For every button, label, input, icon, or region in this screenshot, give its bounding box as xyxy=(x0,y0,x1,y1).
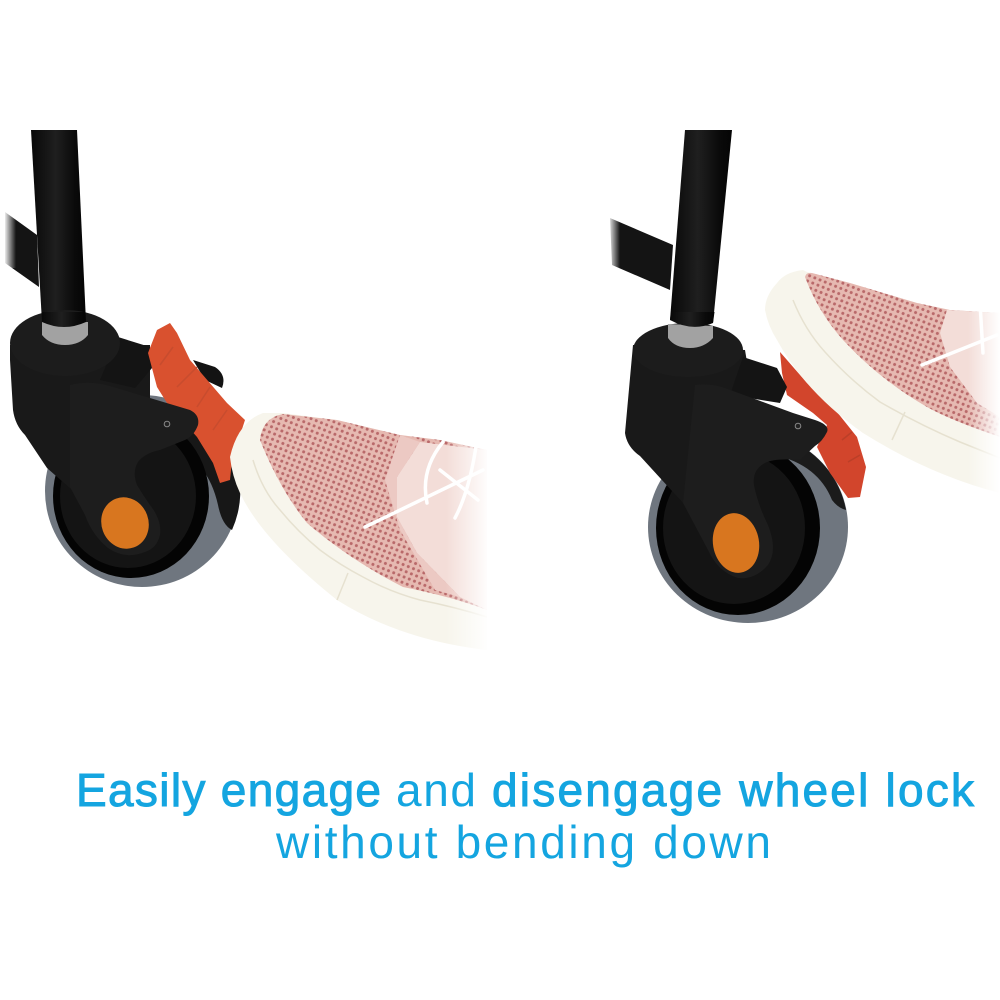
right swivel cap xyxy=(633,323,743,377)
left brake pedal xyxy=(148,323,245,483)
right sole detail xyxy=(793,300,1000,458)
caption line 1: disengage wheel lock xyxy=(492,764,975,816)
right fork plate xyxy=(683,384,828,578)
left cross tube xyxy=(5,212,39,287)
right nut xyxy=(668,324,713,348)
left laces xyxy=(365,440,483,527)
right wheel assembly xyxy=(608,130,866,623)
left reflector xyxy=(94,491,156,555)
left lever back xyxy=(193,360,223,388)
left shoe xyxy=(230,413,490,657)
right pole xyxy=(670,130,732,323)
left pole xyxy=(31,130,86,322)
left pole lower xyxy=(42,312,86,327)
left housing xyxy=(10,345,150,490)
right pin xyxy=(795,423,801,429)
right mesh upper xyxy=(805,273,1000,437)
left fork plate xyxy=(70,383,198,555)
right cross tube xyxy=(610,218,673,290)
left pin xyxy=(164,421,170,427)
left swivel cap xyxy=(10,310,120,376)
right shoe xyxy=(765,270,1000,496)
left sole detail xyxy=(253,460,487,617)
left mesh upper xyxy=(260,414,487,610)
caption line 1: and xyxy=(396,764,476,816)
left shoe fade xyxy=(446,425,490,657)
left wheel assembly xyxy=(4,130,245,587)
caption line 2: without bending down xyxy=(275,816,771,868)
left leather panel xyxy=(397,442,487,610)
right sole xyxy=(765,270,1000,493)
right brake pedal xyxy=(780,352,866,498)
left sole xyxy=(230,413,487,650)
right housing xyxy=(625,345,760,503)
caption line 1: Easily engage xyxy=(76,764,381,816)
right shoe fade xyxy=(968,300,1000,496)
right laces xyxy=(922,303,997,365)
right wheel xyxy=(648,431,848,623)
left nut xyxy=(42,322,88,345)
right pole lower xyxy=(670,312,714,327)
right reflector xyxy=(708,509,764,577)
left wheel xyxy=(45,395,240,587)
right leather panel xyxy=(940,310,1000,417)
right bracket xyxy=(730,357,787,403)
left bracket xyxy=(100,337,152,388)
